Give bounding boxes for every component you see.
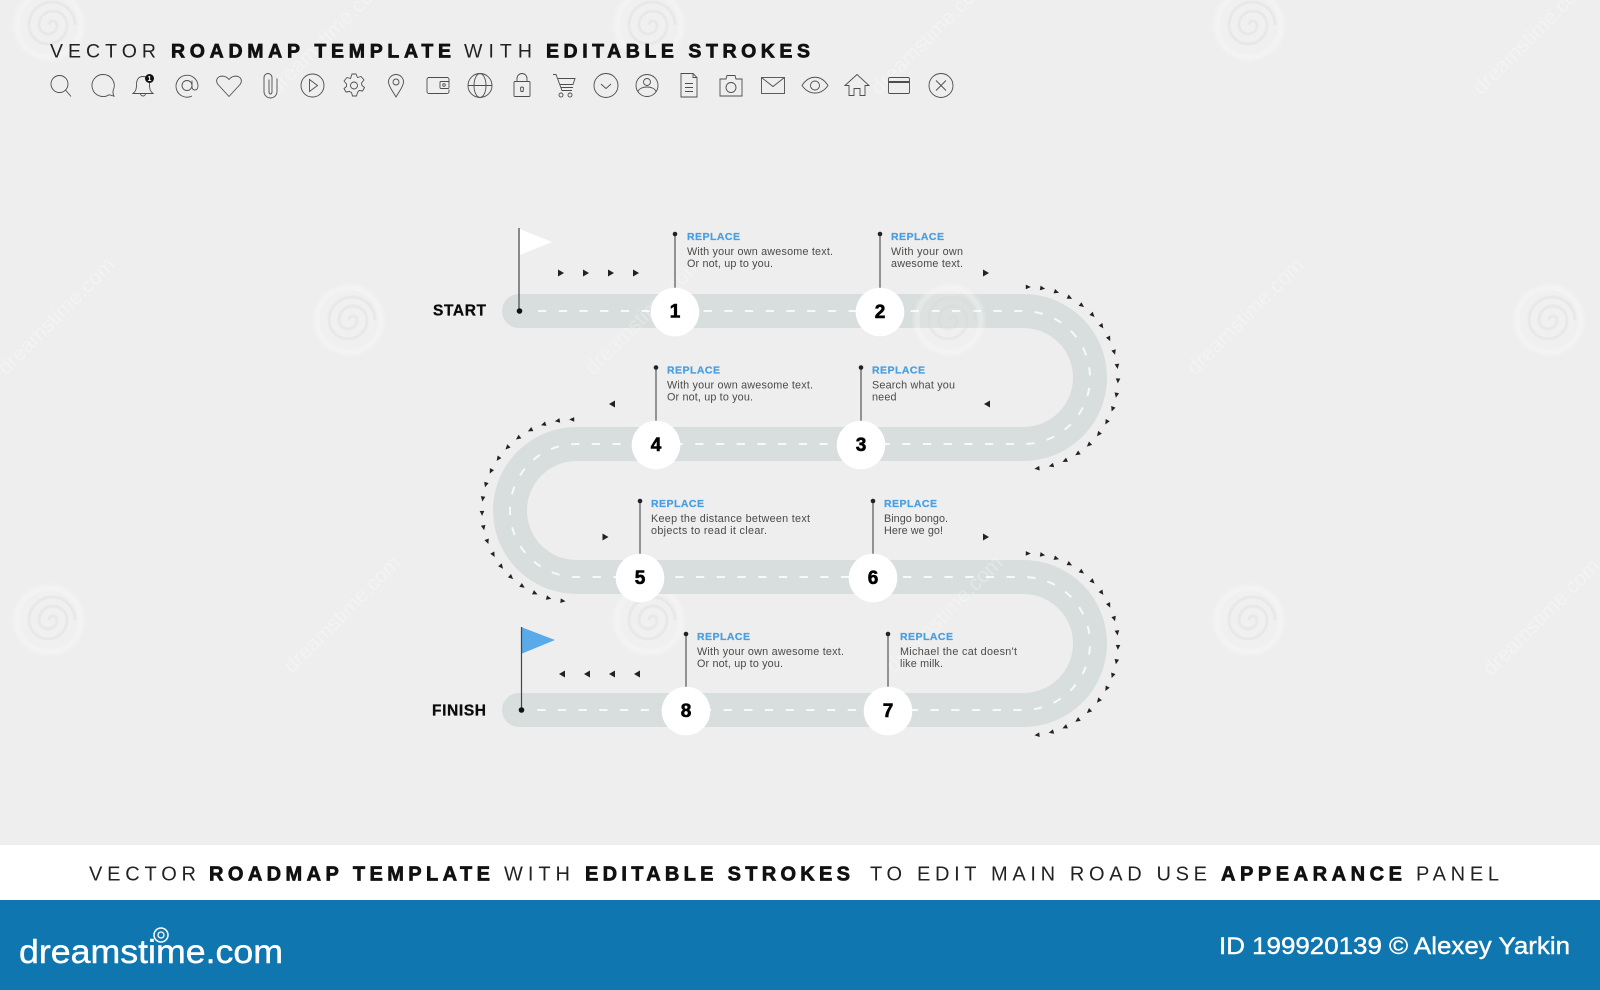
- milestone 1: With your own awesome text.: [687, 246, 833, 258]
- milestone 8: 8: [681, 701, 691, 722]
- icon: at sign: [176, 75, 198, 97]
- milestone 8: With your own awesome text.: [697, 646, 844, 658]
- milestone 2: REPLACE: [891, 231, 944, 243]
- milestone 1: [651, 231, 833, 336]
- icon: bell with badge: 1: [148, 76, 152, 83]
- icon: paperclip: [264, 74, 277, 98]
- milestone 7: like milk.: [900, 658, 943, 670]
- milestone 7: 7: [883, 701, 893, 722]
- curve arrows: first right bend: [1026, 285, 1120, 471]
- milestone 7: [864, 631, 1017, 735]
- icon: shopping cart: [553, 74, 575, 97]
- icon: chevron in circle: [594, 74, 618, 98]
- finish flag: [519, 627, 555, 713]
- milestone 1: 1: [670, 302, 681, 322]
- milestone 4: Or not, up to you.: [667, 392, 753, 404]
- caption text: [89, 864, 1499, 886]
- icon: play: [301, 74, 324, 97]
- milestone 3: 3: [856, 435, 866, 456]
- milestone 6: REPLACE: [884, 498, 937, 510]
- milestone 1: REPLACE: [687, 231, 740, 243]
- milestone 7: Michael the cat doesn't: [900, 646, 1017, 658]
- milestone 3: Search what you: [872, 380, 955, 392]
- curve arrows: left bend: [480, 417, 574, 604]
- milestone 5: objects to read it clear.: [651, 525, 767, 537]
- text: dreamstime.com: [279, 551, 405, 677]
- roadmap: dreamstime.com: [881, 551, 1007, 677]
- icon: globe: [468, 74, 492, 98]
- caption text: VECTOR: [89, 864, 196, 886]
- road centre dashes: [510, 311, 1090, 710]
- icon: search: [51, 76, 71, 96]
- caption text: ROADMAP TEMPLATE: [209, 864, 490, 886]
- icon row: [51, 74, 953, 98]
- milestone 4: 4: [651, 435, 662, 456]
- milestone 4: With your own awesome text.: [667, 380, 813, 392]
- icon: location pin: [388, 74, 404, 97]
- caption text: WITH: [504, 864, 570, 886]
- milestone 2: With your own: [891, 246, 963, 258]
- milestone 6: [849, 498, 948, 602]
- milestone 2: [856, 231, 963, 336]
- milestone 4: [632, 364, 813, 469]
- icon: document: [681, 74, 697, 97]
- caption text: APPEARANCE: [1221, 864, 1402, 886]
- icon: chat bubble: [92, 74, 114, 96]
- title: VECTOR: [50, 40, 156, 62]
- icon: credit card: [888, 78, 910, 94]
- road: [510, 311, 1090, 710]
- finish label: FINISH: [432, 702, 486, 720]
- title: WITH: [464, 40, 532, 62]
- milestone 5: Keep the distance between text: [651, 513, 810, 525]
- curve arrows: second right bend: [1026, 551, 1120, 738]
- caption text: TO EDIT MAIN ROAD USE: [870, 864, 1207, 886]
- icon: close circle: [929, 74, 953, 98]
- milestone 6: Here we go!: [884, 525, 943, 537]
- milestone 7: REPLACE: [900, 631, 953, 643]
- caption text: PANEL: [1416, 864, 1499, 886]
- footer bar: [0, 900, 1600, 990]
- image credit: ID 199920139 © Alexey Yarkin: [1219, 933, 1570, 960]
- icon: camera: [720, 76, 742, 96]
- icon: heart: [217, 76, 241, 96]
- title: [50, 40, 810, 62]
- milestone 1: Or not, up to you.: [687, 258, 773, 270]
- milestone 4: REPLACE: [667, 364, 720, 376]
- title: ROADMAP TEMPLATE: [171, 40, 451, 62]
- milestone 2: 2: [875, 302, 885, 323]
- title: EDITABLE STROKES: [546, 40, 810, 62]
- roadmap: [432, 228, 1120, 738]
- milestone 8: Or not, up to you.: [697, 658, 783, 670]
- start flag: [517, 228, 552, 314]
- milestone 5: [616, 498, 810, 602]
- icon: wallet: [427, 78, 449, 94]
- milestone 6: Bingo bongo.: [884, 513, 948, 525]
- icon: home: [845, 74, 869, 96]
- milestone 8: REPLACE: [697, 631, 750, 643]
- icon: envelope: [762, 78, 784, 94]
- caption strip: [0, 845, 1600, 900]
- roadmap: dreamstime.com: [580, 253, 706, 379]
- icon: bell with badge: [133, 74, 154, 96]
- milestone 5: 5: [635, 568, 646, 589]
- icon: eye: [802, 77, 828, 93]
- milestone 2: awesome text.: [891, 258, 963, 270]
- start label: START: [433, 302, 487, 320]
- milestone 6: 6: [868, 568, 878, 589]
- watermark spiral over road: [912, 283, 986, 357]
- milestone 3: REPLACE: [872, 364, 925, 376]
- milestone 5: REPLACE: [651, 498, 704, 510]
- caption text: EDITABLE STROKES: [585, 864, 850, 886]
- straight direction arrows: [558, 270, 990, 678]
- icon: padlock: [514, 74, 530, 96]
- text: dreamstime.com: [1182, 253, 1308, 379]
- dreamstime logo: dreamstime.com: [19, 933, 283, 970]
- icon: gear: [344, 74, 364, 96]
- milestone 8: [662, 631, 844, 735]
- milestone 3: [837, 364, 955, 469]
- milestone 3: need: [872, 392, 896, 404]
- icon: user: [636, 74, 658, 96]
